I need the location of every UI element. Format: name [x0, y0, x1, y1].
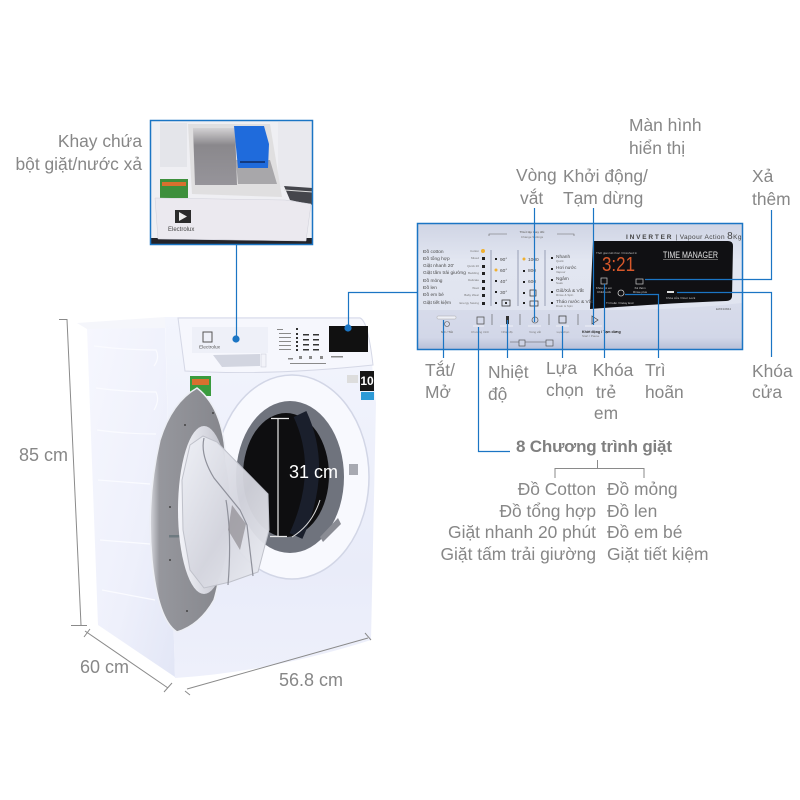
- label: delay: Trì: [645, 360, 666, 380]
- programme list: Giặt tấm trải giường: [423, 270, 466, 276]
- green sticker: [160, 179, 188, 198]
- leader lines from panel: [344, 208, 772, 452]
- lower band: [417, 303, 742, 349]
- options column: Ngâm: [556, 276, 569, 282]
- temperature column: [494, 257, 510, 306]
- washing machine illustration: [77, 317, 376, 678]
- display content: Khóa trẻ em: [596, 286, 613, 290]
- programme list left: [441, 479, 596, 564]
- label: display: hiển thị: [629, 138, 685, 158]
- programme list: Đồ len: [423, 285, 437, 291]
- programme list left: Giặt nhanh 20 phút: [448, 522, 596, 542]
- label: temperature: độ: [488, 384, 507, 404]
- detergent drawer: [192, 327, 268, 367]
- dimension: depth: [80, 629, 172, 692]
- machine side: [87, 326, 175, 677]
- options column: Tháo nước & Vắt: [556, 298, 593, 305]
- inner height marker: [270, 418, 289, 536]
- label: child lock: Khóa: [593, 360, 634, 380]
- display content: [596, 250, 731, 311]
- side slats: [94, 346, 158, 600]
- spin column: 1000: [528, 257, 539, 263]
- dimension: height: 85 cm: [19, 445, 68, 465]
- display: [590, 241, 733, 309]
- dimension: width: 56.8 cm: [279, 670, 343, 690]
- spin column: [522, 257, 539, 306]
- buttons row: Lựa chọn: [557, 330, 570, 334]
- label: delay: hoãn: [645, 382, 684, 402]
- label: power: [425, 360, 455, 402]
- heading: 8 wash programmes: 8 Chương trình giặt: [516, 437, 672, 456]
- latch: [349, 464, 358, 475]
- label: start/pause: Khởi động/: [563, 166, 648, 186]
- spin column: 800: [528, 268, 536, 274]
- programme list right: Đồ mỏng: [607, 479, 678, 499]
- programme list left: Giặt tấm trải giường: [441, 544, 596, 564]
- label: option: chọn: [546, 380, 584, 400]
- programme list: Delicate: [468, 278, 479, 282]
- programme list right: Đồ len: [607, 501, 657, 521]
- bracket: [555, 460, 644, 478]
- door gasket: [236, 401, 344, 553]
- control panel fascia: [178, 318, 373, 373]
- buttons row: Vòng vắt: [529, 329, 541, 334]
- dark gap behind drawer: [284, 186, 313, 205]
- programme list: Cotton: [470, 249, 479, 253]
- dimension: height: [19, 320, 87, 626]
- buttons row: Mở / Tắt: [441, 329, 453, 334]
- options column: Nhanh: [556, 254, 570, 260]
- options column: Giũ/Xả & Vắt: [556, 287, 584, 294]
- label: child lock: em: [594, 403, 618, 423]
- programme list: Đồ em bé: [423, 292, 444, 298]
- machine top plate: [77, 317, 170, 329]
- programme list right: Đồ em bé: [607, 522, 682, 542]
- buttons row: Chương trình: [471, 330, 489, 334]
- label: power: Mở: [425, 382, 451, 402]
- detergent drawer photo: [150, 120, 313, 245]
- label: start/pause: Tạm dừng: [563, 188, 643, 208]
- display content: Khóa cửa / Door Lock: [666, 296, 696, 300]
- drawer compartments: [188, 124, 282, 197]
- options column: Rinse & Spin: [556, 293, 574, 297]
- options column: Vapour: [556, 270, 565, 274]
- bowl inner lines: [203, 438, 253, 585]
- programme list: Quick 20: [467, 264, 479, 268]
- spin column: 600: [528, 279, 536, 285]
- small programme panel: [277, 328, 343, 364]
- temperature column: 90°: [500, 257, 507, 263]
- drum surround: [215, 375, 369, 579]
- temperature column: 40°: [500, 279, 507, 285]
- inner diameter label: 31 cm: [289, 462, 338, 482]
- programme list left: Đồ tổng hợp: [500, 501, 596, 521]
- control panel close-up: [417, 223, 742, 350]
- programme list: Baby Wear: [464, 293, 479, 297]
- programme list: Mixed: [471, 256, 479, 260]
- label: door lock: cửa: [752, 382, 782, 402]
- change settings: [489, 230, 574, 239]
- label: temperature: [488, 362, 529, 404]
- column dividers: [491, 250, 545, 306]
- door inner ring: [178, 426, 230, 594]
- programme list: Giặt tiết kiệm: [423, 300, 451, 306]
- buttons row: Nhiệt độ: [501, 330, 513, 334]
- programme list: Đồ cotton: [423, 249, 444, 255]
- display content: TIME MANAGER: [663, 250, 718, 261]
- label: power: Tắt/: [425, 360, 455, 380]
- programme list: Energy Saving: [459, 301, 479, 305]
- drawer front: [155, 198, 311, 241]
- label: display: Màn hình: [629, 115, 702, 135]
- label: option: [546, 358, 584, 400]
- dimension: depth: 60 cm: [80, 657, 129, 677]
- label: start/pause: [563, 166, 648, 208]
- programme list: Wool: [472, 286, 479, 290]
- display content: Thời gian kết thúc / Finished In: [596, 251, 637, 255]
- display content: 3:21: [602, 254, 635, 276]
- change settings: Thiết lập thay đổi: [520, 230, 544, 234]
- buttons row: Khởi động / Tạm dừng: [582, 330, 621, 334]
- label: child lock: trẻ: [596, 382, 616, 402]
- temperature column: 30°: [500, 290, 507, 296]
- energy label: [190, 376, 211, 396]
- options column: Quick: [556, 259, 564, 263]
- change settings: Change Settings: [521, 235, 544, 239]
- brand strip: INVERTER | Vapour Action 8Kg: [626, 231, 742, 242]
- warranty badge: 10: [360, 374, 374, 388]
- display content: Rinse plus: [633, 290, 647, 294]
- options column: [551, 254, 593, 308]
- door ring: [150, 388, 226, 632]
- door glass bowl: [182, 436, 269, 588]
- display content: Xả thêm: [634, 286, 646, 290]
- programme list left: Đồ Cotton: [518, 479, 596, 499]
- label: detergent tray: [16, 131, 142, 174]
- display content: Child Lock: [597, 290, 611, 294]
- programme list: [423, 249, 485, 306]
- display content: Trì hoãn / Delay End: [606, 301, 634, 305]
- label: door lock: [752, 361, 793, 402]
- programme list: Bedding: [468, 271, 479, 275]
- label: door lock: Khóa: [752, 361, 793, 381]
- programme list: Giặt nhanh 20': [423, 263, 454, 269]
- door hook: [169, 535, 182, 538]
- model sticker: [320, 518, 341, 542]
- label: delay: [645, 360, 684, 402]
- machine front: [165, 317, 376, 678]
- drum interior: [243, 413, 329, 537]
- buttons row: [437, 314, 621, 346]
- label: spin: Vòng: [516, 165, 557, 185]
- door bolts: [169, 412, 214, 612]
- programme list: Đồ tổng hợp: [423, 255, 450, 262]
- Electrolux logo: [175, 210, 191, 223]
- programme list right: [607, 479, 708, 564]
- small display: [329, 326, 368, 352]
- detergent drawer: Electrolux: [199, 344, 221, 350]
- label: temperature: Nhiệt: [488, 362, 529, 382]
- label: child lock: [593, 360, 634, 423]
- label: rinse plus: [752, 166, 791, 209]
- buttons row: Start / Pause: [582, 334, 600, 338]
- options column: Soak: [556, 281, 563, 285]
- label: rinse plus: thêm: [752, 189, 791, 209]
- label: spin: [516, 165, 557, 208]
- display content: EWF10844: [716, 307, 731, 311]
- label: rinse plus: Xả: [752, 166, 774, 186]
- detergent drawer photo: Electrolux: [168, 227, 194, 233]
- warranty badge: [347, 371, 374, 400]
- options column: Hơi nước: [556, 265, 577, 271]
- label: option: Lựa: [546, 358, 577, 378]
- programme list right: Giặt tiết kiệm: [607, 544, 708, 564]
- temperature column: 60°: [500, 268, 507, 274]
- label: spin: vắt: [520, 188, 543, 208]
- label: display: [629, 115, 702, 158]
- programme list: Đồ mỏng: [423, 277, 443, 284]
- drawer leader line: [232, 245, 240, 343]
- label: detergent tray: Khay chứa: [58, 131, 142, 151]
- options column: Drain & Spin: [556, 304, 573, 308]
- label: detergent tray: bột giặt/nước xả: [16, 154, 142, 174]
- dimension: width: [185, 633, 371, 695]
